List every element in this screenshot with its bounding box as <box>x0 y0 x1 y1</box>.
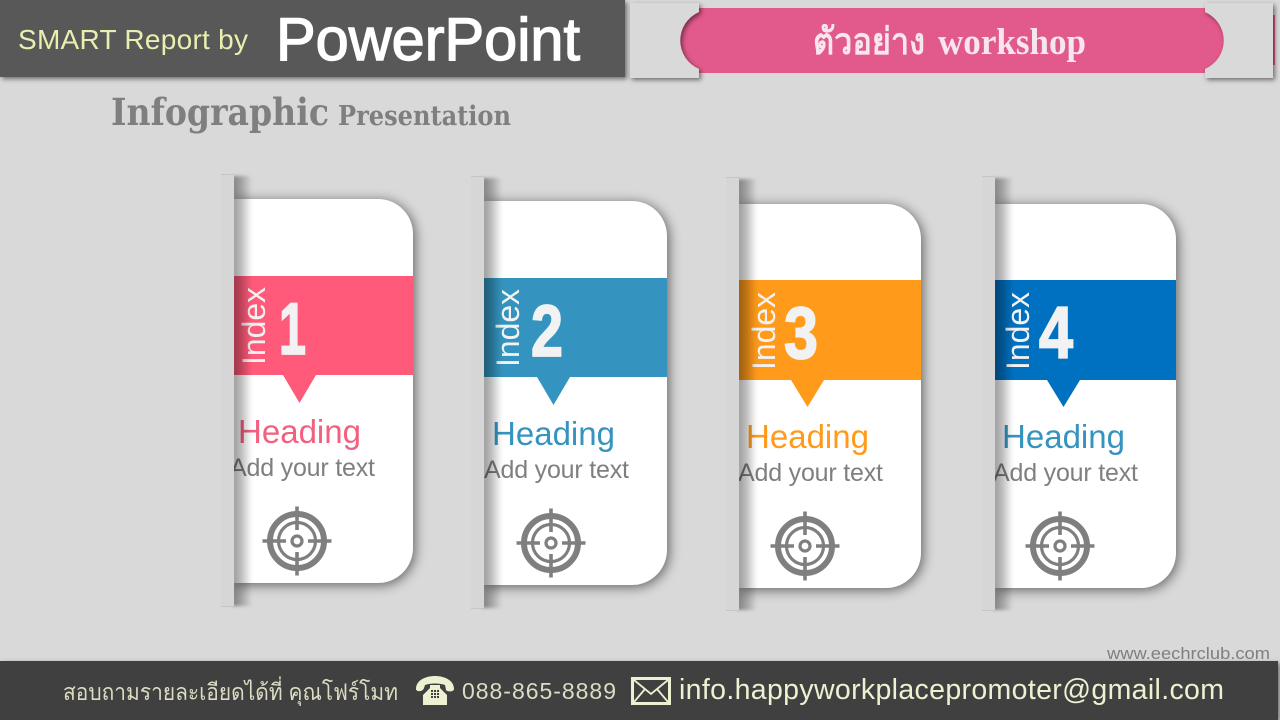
panel: card 3 <box>726 177 923 611</box>
subtitle <box>111 90 511 134</box>
email address: info.happyworkplacepromoter@gmail.com <box>679 674 1224 706</box>
banner text latin: workshop <box>938 22 1086 63</box>
banner left tab <box>630 3 699 78</box>
body text: Add your text <box>993 459 1138 487</box>
icon: target <box>770 512 840 580</box>
body text: Add your text <box>484 456 629 484</box>
icon: envelope <box>631 677 671 705</box>
banner text: ตัวอย่าง <box>813 22 925 63</box>
subtitle: Infographic <box>111 90 329 134</box>
index number: 1 <box>279 289 306 370</box>
panel: card 4 <box>982 176 1178 611</box>
side strip <box>471 176 502 609</box>
side strip <box>982 176 1013 611</box>
phone number: 088-865-8889 <box>462 678 616 704</box>
band <box>739 280 921 380</box>
subtitle: Presentation <box>338 101 511 132</box>
index label: Index <box>746 292 782 370</box>
heading: Heading <box>1002 418 1125 455</box>
panel: card 2 <box>471 176 669 609</box>
band <box>484 278 667 377</box>
heading: Heading <box>492 415 615 452</box>
header title: PowerPoint <box>276 6 580 73</box>
pointer <box>791 380 824 407</box>
website link: www.eechrclub.com <box>1106 644 1270 663</box>
heading: Heading <box>238 413 361 450</box>
index label: Index <box>1000 292 1036 370</box>
icon: target <box>1026 512 1094 580</box>
pointer <box>1047 380 1080 407</box>
index number: 4 <box>1039 293 1073 374</box>
icon: target <box>262 506 332 576</box>
icon: target <box>516 508 586 578</box>
header bar <box>0 0 625 77</box>
icon: telephone <box>416 676 454 705</box>
pink title banner <box>630 3 1275 78</box>
band <box>234 276 413 375</box>
heading: Heading <box>746 418 869 455</box>
pointer <box>537 377 570 405</box>
banner right tab <box>1205 3 1273 78</box>
footer bar <box>0 661 1278 720</box>
body text: Add your text <box>230 454 375 482</box>
index number: 3 <box>784 293 818 374</box>
side strip <box>726 177 757 611</box>
panel: card 1 <box>221 174 415 607</box>
side strip <box>221 174 252 607</box>
body text: Add your text <box>738 459 883 487</box>
pointer <box>283 375 316 403</box>
index label: Index <box>236 287 272 365</box>
index label: Index <box>490 289 526 367</box>
band <box>995 280 1176 380</box>
footer contact text: สอบถามรายละเอียดได้ที่ คุณโฟร์โมท <box>63 676 398 706</box>
header label: SMART Report by <box>18 24 248 55</box>
index number: 2 <box>531 291 563 372</box>
